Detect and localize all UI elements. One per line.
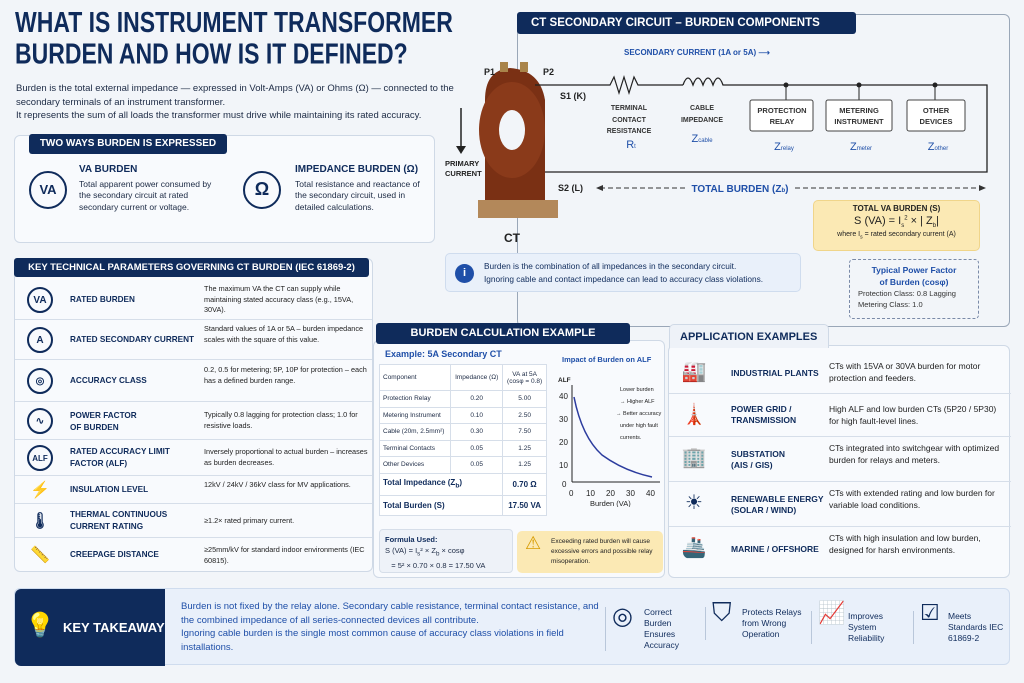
badge: standards: Meets Standards IEC 61869-2: [948, 611, 1003, 643]
row: rated burden: RATED BURDEN: [70, 295, 135, 304]
formula: = 5² × 0.70 × 0.8 = 17.50 VA: [391, 560, 485, 570]
panel: key technical parameters: [14, 258, 373, 572]
heading: APPLICATION EXAMPLES: [680, 331, 817, 343]
table: 1.25: [518, 445, 531, 452]
circuit diagram: RESISTANCE: [607, 128, 652, 135]
app: power grid: High ALF and low burden CTs (5P20 / 5P30) for high fault-level lines.: [829, 404, 996, 426]
row: rated burden: VA: [33, 294, 47, 306]
circuit diagram: CURRENT: [445, 169, 482, 178]
circuit diagram: TOTAL BURDEN (Zb): [691, 184, 789, 195]
heading: [29, 134, 227, 154]
row: ALF: Inversely proportional to actual burden – increases as burden decreases.: [204, 447, 367, 466]
callout: power factor: of Burden (cosφ): [880, 277, 948, 287]
intro text: Burden is the total external impedance — expressed in Volt-Amps (VA) or Ohms (Ω) — connected to the secondary terminals of an instrument transformer.: [16, 83, 454, 108]
row: power factor: [15, 401, 372, 439]
table: VA at 5A: [512, 370, 537, 378]
row: rated burden: [27, 284, 353, 314]
app: substation: (AIS / GIS): [731, 460, 773, 470]
panel: application examples: [668, 345, 1010, 578]
table: 2.50: [518, 412, 531, 419]
table: (cosφ = 0.8): [507, 378, 542, 384]
table: Cable (20m, 2.5mm²): [383, 428, 444, 435]
circuit diagram: TERMINAL: [611, 105, 648, 112]
row: rated burden: The maximum VA the CT can supply while maintaining stated accuracy class (e.g., 15VA, 30VA).: [204, 284, 353, 314]
row: ALF: [15, 439, 372, 475]
CT image: [478, 62, 558, 218]
impedance burden text: [295, 164, 420, 212]
table: 0.30: [470, 428, 483, 435]
VA burden text: VA BURDEN: [79, 164, 137, 175]
row: secondary current: Standard values of 1A or 5A – burden impedance scales with the square of this value.: [204, 324, 363, 344]
row: creepage: [15, 537, 372, 571]
intro text: [16, 83, 454, 121]
chart: impact of burden on ALF: 10: [559, 461, 568, 470]
app: industrial: CTs with 15VA or 30VA burden for motor protection and feeders.: [829, 361, 980, 382]
row: insulation: 12kV / 24kV / 36kV class for MV applications.: [204, 480, 351, 489]
row: thermal: THERMAL CONTINUOUS: [70, 510, 167, 519]
VA burden text: Total apparent power consumed by the secondary circuit at rated secondary current or voltage.: [79, 178, 211, 212]
row: thermal: 🌡: [30, 513, 50, 530]
info note: Burden is the combination of all impedances in the secondary circuit.: [484, 261, 736, 271]
row: power factor: POWER FACTOR: [70, 411, 137, 420]
icon: info: i: [463, 267, 466, 279]
circuit diagram: RELAY: [770, 117, 794, 126]
panel: burden calculation: [373, 340, 665, 578]
app: substation: 🏢: [682, 447, 706, 469]
heading: KEY TECHNICAL PARAMETERS GOVERNING CT BURDEN (IEC 61869-2): [28, 262, 355, 273]
title: WHAT IS INSTRUMENT TRANSFORMER: [15, 6, 453, 38]
heading: [14, 258, 369, 277]
row: creepage: ≥25mm/kV for standard indoor environments (IEC 60815).: [204, 545, 365, 564]
chart: impact of burden on ALF: 10: [586, 489, 595, 498]
panel: key takeaway: [14, 588, 1010, 665]
badge: standards: ☑: [920, 600, 940, 625]
icon: ohm: [243, 171, 281, 209]
info note: [445, 253, 801, 292]
title: [15, 6, 453, 70]
circuit diagram: CONTACT: [612, 117, 647, 124]
row: accuracy class: [15, 359, 372, 401]
table: Protection Relay: [383, 395, 431, 402]
icon: VA: VA: [39, 182, 57, 197]
circuit diagram: INSTRUMENT: [834, 117, 884, 126]
callout: power factor: Protection Class: 0.8 Lagging: [858, 289, 956, 298]
row: ALF: ALF: [32, 454, 48, 462]
table: Terminal Contacts: [383, 445, 435, 452]
row: secondary current: A: [36, 334, 44, 346]
app: renewable: ☀: [685, 492, 703, 514]
table: Metering Instrument: [383, 412, 441, 419]
table: 0.10: [470, 412, 483, 419]
app: power grid: 🗼: [682, 404, 706, 426]
row: power factor: ∿: [36, 416, 44, 426]
badge: reliability: Improves System Reliability: [848, 611, 884, 643]
app: marine: MARINE / OFFSHORE: [731, 544, 819, 554]
row: creepage: CREEPAGE DISTANCE: [70, 550, 159, 559]
heading: TWO WAYS BURDEN IS EXPRESSED: [40, 138, 216, 149]
table: Example: 5A Secondary CT: [385, 349, 502, 359]
badge: correct burden: [605, 607, 701, 651]
chart: impact of burden on ALF: currents.: [620, 435, 642, 441]
chart: impact of burden on ALF: 0: [569, 489, 574, 498]
row: thermal: ≥1.2× rated primary current.: [204, 516, 294, 525]
row: power factor: OF BURDEN: [70, 423, 119, 432]
chart: impact of burden on ALF: 20: [606, 489, 615, 498]
circuit diagram: P1: [484, 67, 495, 77]
badge: protects relays: Protects Relays from Wrong Operation: [742, 607, 802, 639]
app: substation: SUBSTATION: [731, 449, 785, 459]
warning callout: Exceeding rated burden will cause excessive errors and possible relay misoperation.: [551, 538, 653, 565]
VA burden text: [79, 164, 212, 212]
app: power grid: TRANSMISSION: [731, 415, 796, 425]
circuit diagram: DEVICES: [920, 117, 952, 126]
heading: circuit: [517, 12, 856, 34]
circuit diagram: Zcable: [691, 133, 713, 145]
table: 1.25: [518, 461, 531, 468]
chart: impact of burden on ALF: [558, 355, 662, 507]
circuit diagram: S2 (L): [558, 183, 583, 193]
badge: reliability: 📈: [818, 600, 845, 625]
table: 5.00: [518, 395, 531, 402]
chart: impact of burden on ALF: Lower burden: [620, 387, 654, 393]
row: ALF: RATED ACCURACY LIMIT: [70, 447, 170, 456]
row: insulation: [15, 475, 372, 503]
app: marine: [669, 526, 1011, 571]
callout: power factor: Typical Power Factor: [872, 265, 956, 275]
table: Total Impedance (Zb): [383, 478, 462, 490]
intro text: It represents the sum of all loads the transformer must drive while maintaining its rated accuracy.: [16, 110, 421, 121]
takeaway text: Ignoring cable burden is the single most common cause of accuracy class violations in field installations.: [181, 628, 564, 652]
chart: impact of burden on ALF: Impact of Burden on ALF: [562, 355, 652, 364]
chart: impact of burden on ALF: ALF: [558, 377, 571, 384]
impedance burden text: Total resistance and reactance of the secondary circuit, used in detailed calculations.: [295, 178, 420, 212]
row: accuracy class: ◎: [36, 376, 44, 386]
chart: impact of burden on ALF: 20: [559, 438, 568, 447]
table: [379, 349, 547, 516]
circuit diagram: IMPEDANCE: [681, 117, 723, 124]
icon: bulb: 💡: [25, 612, 55, 639]
app: renewable: [669, 481, 1011, 526]
circuit diagram: Zother: [928, 141, 948, 153]
icon: warning: ⚠: [525, 533, 541, 553]
row: secondary current: RATED SECONDARY CURRENT: [70, 335, 194, 344]
app: substation: CTs integrated into switchgear with optimized burden for relays and meters.: [829, 443, 999, 464]
app: power grid: POWER GRID /: [731, 404, 791, 414]
callout: power factor: [849, 259, 979, 319]
formula: [379, 529, 513, 573]
row: thermal: [15, 503, 372, 537]
chart: impact of burden on ALF: 40: [646, 489, 655, 498]
table: 7.50: [518, 428, 531, 435]
table: Component: [383, 374, 417, 381]
circuit diagram: [445, 48, 988, 245]
row: accuracy class: ACCURACY CLASS: [70, 376, 147, 385]
heading: [669, 324, 829, 348]
table: 17.50 VA: [508, 500, 541, 510]
key takeaway label: [15, 589, 165, 666]
icon: VA: [29, 171, 67, 209]
circuit diagram: S1 (K): [560, 91, 586, 101]
app: marine: 🚢: [682, 537, 706, 559]
warning callout: [517, 531, 663, 573]
callout: total VA burden: [813, 200, 980, 251]
heading: [376, 323, 630, 344]
chart: impact of burden on ALF: 30: [626, 489, 635, 498]
circuit diagram: Zrelay: [774, 141, 794, 153]
circuit diagram: METERING: [839, 106, 879, 115]
app: industrial: [682, 361, 980, 383]
table: 0.20: [470, 395, 483, 402]
formula: Formula Used:: [385, 535, 438, 544]
callout: total VA burden: where Is = rated secondary current (A): [837, 231, 956, 241]
chart: impact of burden on ALF: 30: [559, 415, 568, 424]
app: substation: [669, 436, 1011, 481]
app: industrial: 🏭: [682, 361, 706, 383]
takeaway text: Burden is not fixed by the relay alone. Secondary cable resistance, terminal contact resistance, and the combined impedance of all series-connected devices all contribute.: [181, 601, 599, 626]
key takeaway label: KEY TAKEAWAY: [63, 620, 165, 635]
chart: impact of burden on ALF: 0: [562, 480, 567, 489]
row: power factor: Typically 0.8 lagging for protection class; 1.0 for resistive loads.: [204, 410, 358, 430]
circuit diagram: OTHER: [923, 106, 950, 115]
info note: Ignoring cable and contact impedance can lead to accuracy class violations.: [484, 274, 763, 284]
circuit diagram: Rt: [626, 139, 636, 151]
row: creepage: 📏: [30, 547, 50, 564]
app: marine: CTs with high insulation and low burden, designed for harsh environments.: [829, 533, 981, 554]
app: renewable: RENEWABLE ENERGY: [731, 494, 824, 504]
row: accuracy class: 0.2, 0.5 for metering; 5P, 10P for protection – each has a defined burden range.: [204, 365, 367, 384]
app: renewable: (SOLAR / WIND): [731, 505, 796, 515]
circuit diagram: PRIMARY: [445, 159, 479, 168]
row: secondary current: [15, 319, 372, 359]
title: BURDEN AND HOW IS IT DEFINED?: [15, 37, 408, 70]
circuit diagram: Zmeter: [850, 141, 872, 153]
badge: protects relays: ⛉: [712, 597, 732, 627]
row: thermal: CURRENT RATING: [70, 522, 143, 531]
panel: CT secondary circuit: [517, 14, 1010, 327]
callout: power factor: Metering Class: 1.0: [858, 300, 923, 309]
app: power grid: [669, 393, 1011, 438]
row: insulation: INSULATION LEVEL: [70, 485, 148, 494]
badge: reliability: [811, 611, 911, 644]
badge: correct burden: Correct Burden Ensures Accuracy: [644, 607, 679, 650]
circuit diagram: CABLE: [690, 105, 714, 112]
icon: info: [455, 264, 474, 283]
heading: circuit: CT SECONDARY CIRCUIT – BURDEN COMPONENTS: [531, 17, 820, 29]
table: 0.05: [470, 445, 483, 452]
panel: two ways: [14, 135, 435, 243]
table: Impedance (Ω): [455, 374, 498, 381]
chart: impact of burden on ALF: → Better accuracy: [616, 411, 661, 417]
app: industrial: INDUSTRIAL PLANTS: [731, 368, 819, 378]
row: insulation: ⚡: [30, 482, 50, 499]
impedance burden text: IMPEDANCE BURDEN (Ω): [295, 164, 418, 175]
badge: standards: [913, 611, 1009, 644]
formula: S (VA) = Is² × Zb × cosφ: [385, 546, 465, 558]
callout: total VA burden: TOTAL VA BURDEN (S): [853, 204, 940, 213]
icon: ohm: Ω: [255, 179, 269, 199]
badge: correct burden: ◎: [612, 603, 633, 630]
circuit diagram: SECONDARY CURRENT (1A or 5A) ⟶: [624, 48, 770, 57]
chart: impact of burden on ALF: under high fault: [620, 423, 658, 429]
table: Total Burden (S): [383, 500, 445, 510]
row: ALF: FACTOR (ALF): [70, 459, 127, 468]
table: Other Devices: [383, 461, 424, 468]
app: renewable: CTs with extended rating and low burden for variable load conditions.: [829, 488, 995, 510]
table: 0.05: [470, 461, 483, 468]
circuit diagram: CT: [504, 231, 521, 245]
heading: BURDEN CALCULATION EXAMPLE: [411, 327, 595, 339]
badge: protects relays: [705, 607, 809, 640]
chart: impact of burden on ALF: → Higher ALF: [620, 399, 655, 405]
chart: impact of burden on ALF: 40: [559, 392, 568, 401]
circuit diagram: P2: [543, 67, 554, 77]
circuit diagram: PROTECTION: [757, 106, 807, 115]
callout: total VA burden: S (VA) = Is2 × | Zb|: [854, 215, 939, 229]
takeaway text: [181, 601, 599, 652]
table: 0.70 Ω: [512, 480, 537, 488]
